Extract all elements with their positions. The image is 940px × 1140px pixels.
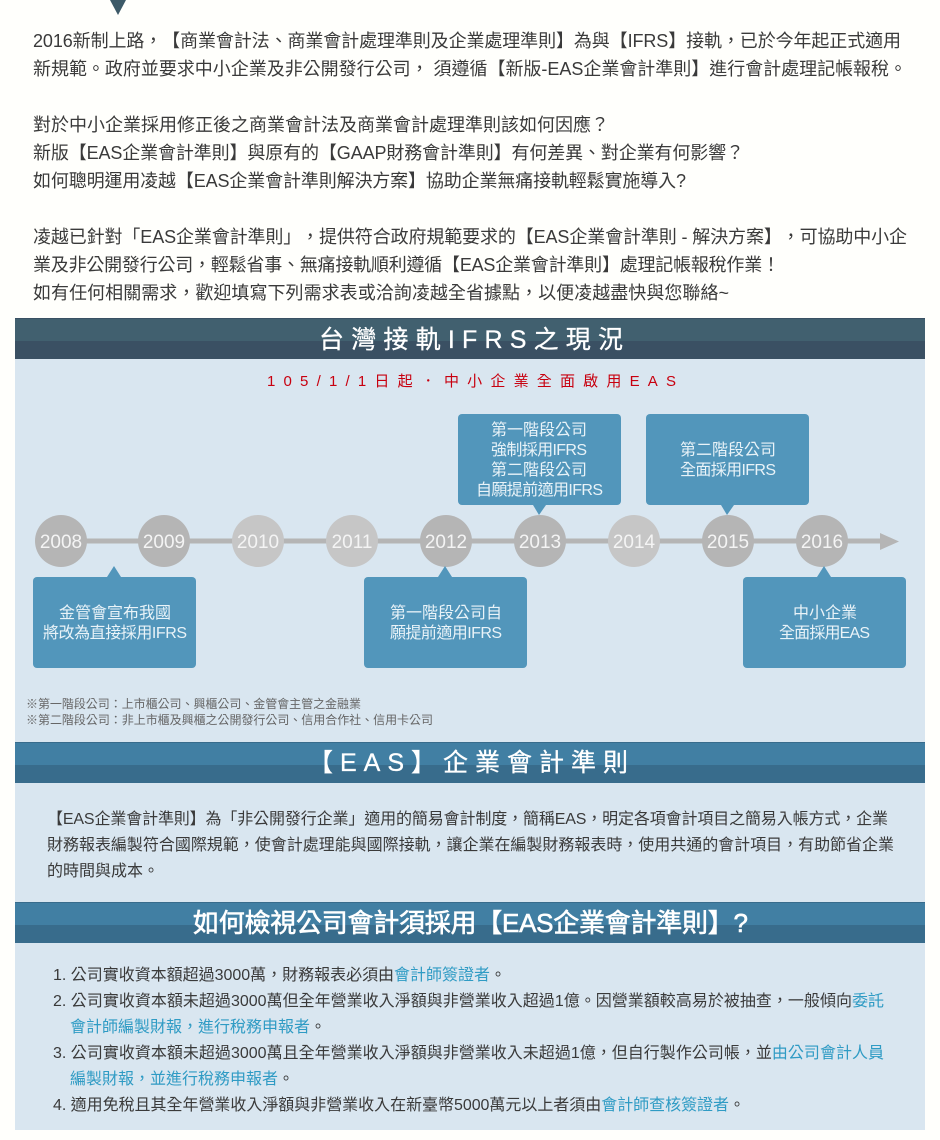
heading: 如何檢視公司會計須採用EAS [15,902,925,943]
numbered criteria list: 2. 公司實收資本額未超過3000萬但全年營業收入淨額與非營業收入超過1億。因營業額較高易於被抽查，一般傾向委託 [53,991,884,1010]
year nodes: 2009 [143,532,185,553]
intro text block [33,31,907,303]
callout: 2012 [364,566,527,668]
EAS description text: 【EAS企業會計準則】為「非公開發行企業」適用的簡易會計制度，簡稱EAS，明定各項會計項目之簡易入帳方式，企業 [47,809,888,828]
year nodes: 2012 [425,532,467,553]
numbered criteria list: 會計師編製財報，進行稅務申報者。 [70,1018,326,1036]
callout: 2013: 第一階段公司 [491,420,587,439]
year nodes: 2011 [332,532,372,553]
footnotes: ※第一階段公司：上市櫃公司、興櫃公司、金管會主管之金融業 [26,696,361,711]
numbered criteria list: 編製財報，並進行稅務申報者。 [70,1070,294,1088]
intro text block: 凌越已針對「EAS企業會計準則」，提供符合政府規範要求的【EAS企業會計準則 - 解決方案】，可協助中小企 [33,227,907,247]
panel: light blue background [15,359,925,1130]
intro text block: 業及非公開發行公司，輕鬆省事、無痛接軌順利遵循【EAS企業會計準則】處理記帳報稅作業！ [33,254,780,275]
EAS description text [47,809,894,880]
footnotes [26,696,433,727]
subtitle: red date line: 105/1/1日起．中小企業全面啟用EAS [267,372,676,390]
callout: 2016 [743,566,906,668]
numbered criteria list: 1. 公司實收資本額超過3000萬，財務報表必須由會計師簽證者。 [53,965,506,984]
callout: 2013 [458,414,621,515]
year nodes: 2010 [237,532,279,553]
year nodes: 2015 [707,532,749,553]
icon: top pointer triangle [110,0,126,15]
intro text block: 2016新制上路，【商業會計法、商業會計處理準則及企業處理準則】為與【IFRS】接軌，已於今年起正式適用 [33,31,901,51]
intro text block: 對於中小企業採用修正後之商業會計法及商業會計處理準則該如何因應？ [33,114,609,135]
heading: EAS企業會計準則: 【EAS】企業會計準則 [308,749,628,777]
year nodes: 2013 [519,532,561,553]
timeline axis arrow [61,533,899,550]
callout: 2009: 金管會宣布我國 [59,603,171,622]
timeline [35,515,899,567]
callout: 2009 [33,566,196,668]
callout: 2015: 第二階段公司 [680,440,776,459]
callout: 2015 [646,414,809,515]
heading: 台灣接軌IFRS之現況: 台灣接軌IFRS之現況 [319,326,623,354]
callout: 2016: 全面採用EAS [779,624,870,642]
callout: 2012: 第一階段公司自 [390,603,502,622]
heading: 台灣接軌IFRS之現況 [15,318,925,359]
callout: 2009: 將改為直接採用IFRS [43,624,187,642]
numbered criteria list: 3. 公司實收資本額未超過3000萬且全年營業收入淨額與非營業收入未超過1億，但自行製作公司帳，並由公司會計人員 [53,1043,884,1062]
callout: 2013: 強制採用IFRS [491,441,587,459]
intro text block: 如何聰明運用凌越【EAS企業會計準則解決方案】協助企業無痛接軌輕鬆實施導入? [33,170,686,191]
intro text block: 如有任何相關需求，歡迎填寫下列需求表或洽詢凌越全省據點，以便凌越盡快與您聯絡~ [33,283,729,303]
year nodes: 2008 [40,532,82,553]
EAS description text: 財務報表編製符合國際規範，使會計處理能與國際接軌，讓企業在編製財務報表時，使用共通的會計項目，有助節省企業 [47,835,894,854]
callout: 2012: 願提前適用IFRS [390,624,502,642]
numbered criteria list [53,965,884,1114]
year nodes: 2014 [613,532,656,553]
heading: EAS企業會計準則 [15,742,925,783]
callout: 2015: 全面採用IFRS [680,461,776,479]
callout: 2016: 中小企業 [793,604,857,622]
numbered criteria list: 4. 適用免稅且其全年營業收入淨額與非營業收入在新臺幣5000萬元以上者須由會計師查核簽證者。 [53,1096,745,1114]
callout: 2013: 自願提前適用IFRS [476,481,603,499]
year nodes: 2016 [801,532,843,553]
year nodes [35,515,848,567]
heading: 如何檢視公司會計須採用EAS: 如何檢視公司會計須採用【EAS企業會計準則】? [193,908,748,938]
callout: 2013: 第二階段公司 [491,460,587,479]
intro text block: 新版【EAS企業會計準則】與原有的【GAAP財務會計準則】有何差異、對企業有何影響？ [33,143,744,163]
footnotes: ※第二階段公司：非上市櫃及興櫃之公開發行公司、信用合作社、信用卡公司 [26,712,433,727]
EAS description text: 的時間與成本。 [47,862,159,880]
intro text block: 新規範。政府並要求中小企業及非公開發行公司， 須遵循【新版-EAS企業會計準則】進行會計處理記帳報稅。 [33,59,907,79]
